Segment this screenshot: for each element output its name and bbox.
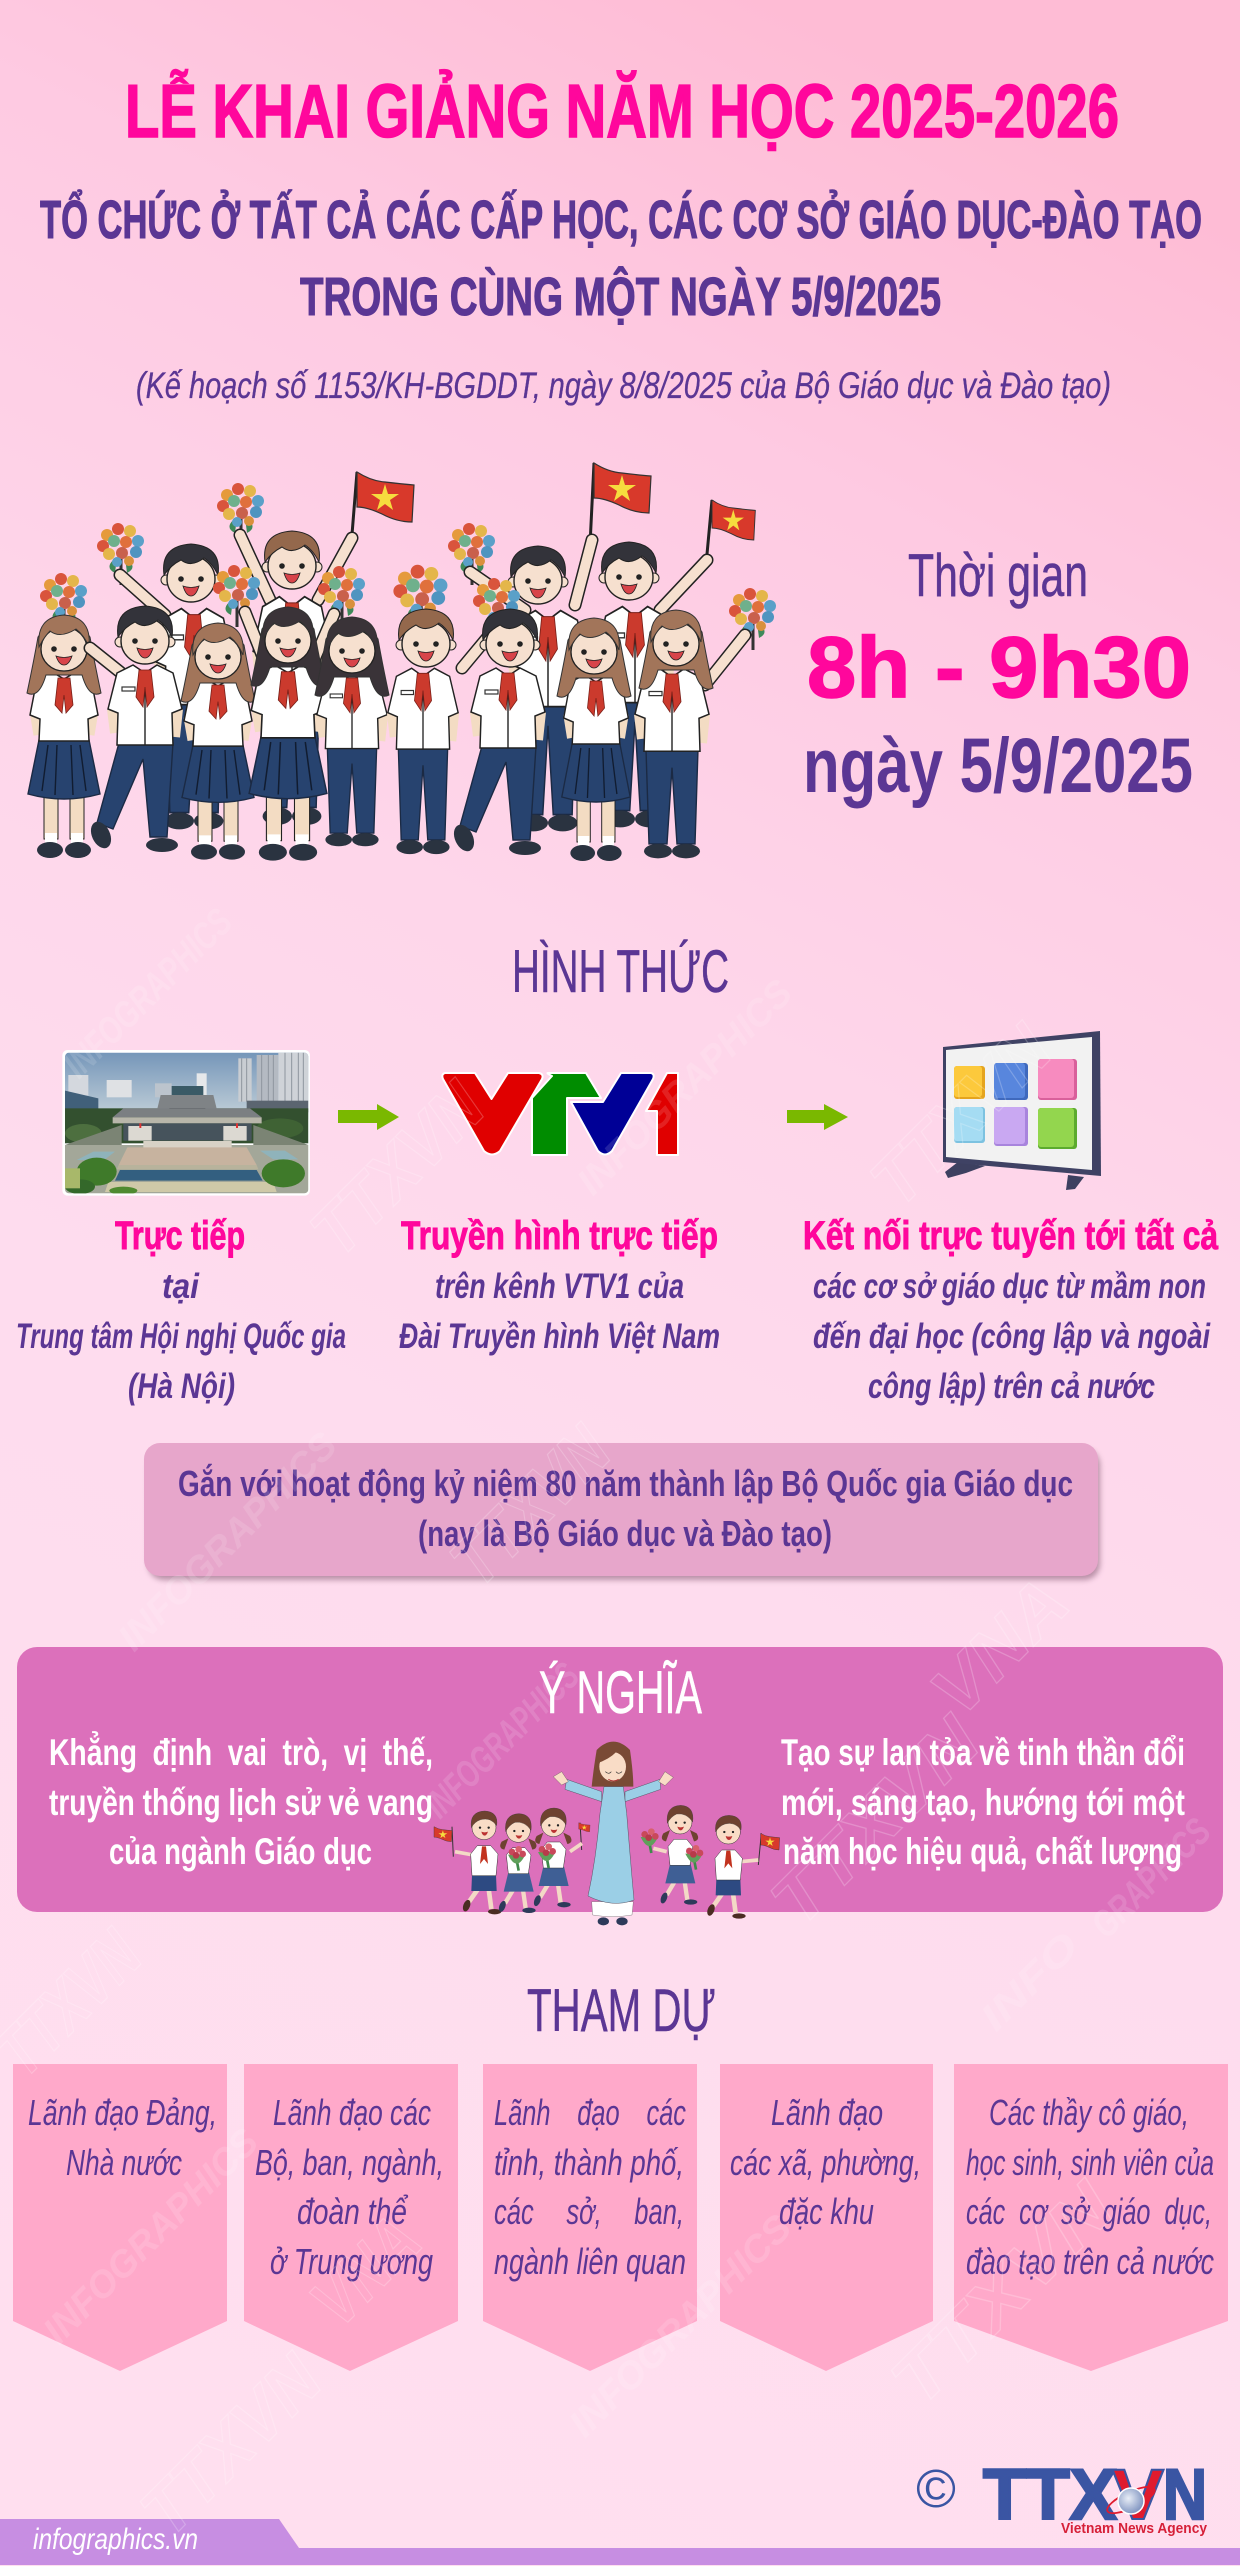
banner 5: [954, 2064, 1228, 2371]
watermarks: TTXVN: [755, 1700, 996, 1941]
logo: TTXVN: V: [1112, 2456, 1164, 2535]
banner 1: Nhà nước: [66, 2142, 182, 2183]
caption: online connection: [803, 1214, 1219, 1406]
watermarks: [0, 901, 1219, 2551]
time block: [803, 542, 1193, 809]
photo: National Convention Center: [62, 1050, 310, 1196]
left text: [49, 1731, 433, 1872]
logo: VTV1: [442, 1073, 678, 1155]
banner 1: [13, 2064, 227, 2371]
watermarks: INFOGRAPHICS: [111, 1425, 345, 1659]
banner 2: [244, 2064, 458, 2371]
front row student 1: [27, 615, 101, 858]
front row student 4: [245, 607, 334, 861]
watermarks: TTXVN: [855, 1009, 1067, 1221]
front row student 5: [315, 617, 389, 846]
banner 2: ở Trung ương: [270, 2241, 433, 2282]
illustration: teacher and pupils: [434, 1742, 780, 1925]
callout: anniversary: [144, 1443, 1100, 1580]
pupils: [434, 1805, 780, 1919]
caption line: Trung tâm Hội nghị Quốc gia: [16, 1317, 346, 1356]
footer site name: infographics.vn: [33, 2523, 198, 2556]
left text: truyền thống lịch sử vẻ vang: [49, 1782, 433, 1823]
teacher: [553, 1742, 673, 1925]
arrow 2: [787, 1104, 848, 1130]
back row student 2: [240, 531, 352, 825]
banner 1: Lãnh đạo Đảng,: [28, 2092, 217, 2133]
watermarks: INFOGRAPHICS: [56, 901, 241, 1086]
time value: 8h - 9h30: [807, 620, 1191, 716]
front row student 7: [450, 609, 545, 855]
watermarks: INFOGRAPHICS: [36, 2121, 267, 2352]
watermarks: TTXVN: [295, 1066, 500, 1271]
illustration: students with flags and flowers: [27, 463, 776, 861]
caption line: Đài Truyền hình Việt Nam: [399, 1317, 720, 1356]
back row student 3: [470, 540, 592, 831]
caption line: công lập) trên cả nước: [868, 1367, 1155, 1406]
watermarks: VNA: [295, 2201, 435, 2341]
front row student 3: [181, 623, 255, 860]
panel: significance: [17, 1647, 1223, 1925]
watermarks: INFOGRAPHICS: [570, 972, 801, 1203]
bouquets and flags of the back row: [97, 463, 755, 585]
banner 2: đoàn thể: [297, 2191, 409, 2232]
watermarks: INFOGRAPHICS: [562, 2207, 800, 2445]
banner 3: ngành liên quan: [494, 2241, 686, 2282]
copyright symbol: ©: [916, 2459, 956, 2519]
banner 2: Lãnh đạo các: [273, 2092, 431, 2133]
banner 4: đặc khu: [779, 2191, 874, 2232]
watermarks: TTXVN: [125, 2339, 337, 2551]
footer band: [0, 2519, 1240, 2565]
front row student 9: [635, 610, 745, 858]
left text: của ngành Giáo dục: [109, 1831, 372, 1872]
logo: TTXVN: Vietnam News Agency: [1061, 2520, 1208, 2537]
watermarks: INFOGRAPHICS: [417, 1655, 588, 1826]
caption line: trên kênh VTV1 của: [435, 1267, 684, 1306]
watermarks: TTXVN: [875, 2166, 1130, 2421]
panel heading: Ý NGHĨA: [539, 1659, 702, 1726]
back row student 4: [596, 542, 707, 827]
icon: television: [943, 1031, 1101, 1190]
left text: Khẳng định vai trò, vị thế,: [49, 1731, 433, 1773]
banner 4: các xã, phường,: [730, 2142, 921, 2183]
watermarks: VNA: [915, 1562, 1084, 1731]
heading: Tham dự: THAM DỰ: [527, 1977, 716, 2044]
banner 3: tỉnh, thành phố,: [494, 2142, 684, 2183]
back row student 1: [120, 544, 233, 829]
front row student 2: [87, 606, 182, 852]
banner 3: Lãnh đạo các: [494, 2092, 686, 2133]
logo: TTXVN: N: [1163, 2456, 1207, 2535]
time label: Thời gian: [908, 542, 1088, 609]
logo: TTXVN: [983, 2456, 1208, 2537]
arrow 1: [338, 1104, 399, 1130]
front row student 6: [388, 609, 458, 854]
banner 3: [483, 2064, 697, 2371]
caption line: (Hà Nội): [128, 1367, 235, 1406]
heading: Hình thức: HÌNH THỨC: [512, 938, 729, 1005]
banner 4: [720, 2064, 933, 2371]
caption: direct: [16, 1214, 346, 1406]
caption line: tại: [162, 1267, 200, 1306]
right text: [781, 1732, 1185, 1872]
bouquets of the front row: [40, 565, 776, 650]
front row student 8: [557, 618, 631, 861]
banner 2: Bộ, ban, ngành,: [255, 2142, 444, 2183]
caption heading: Truyền hình trực tiếp: [401, 1214, 718, 1258]
watermarks: INFO: [973, 1925, 1087, 2039]
callout line 2: (nay là Bộ Giáo dục và Đào tạo): [418, 1513, 832, 1554]
logo: TTXVN: TTX: [983, 2456, 1117, 2535]
banner 3: các sở, ban,: [494, 2191, 684, 2232]
subtitle line 2: TRONG CÙNG MỘT NGÀY 5/9/2025: [300, 266, 941, 327]
banner 4: Lãnh đạo: [771, 2092, 883, 2133]
caption heading: Trực tiếp: [115, 1214, 245, 1258]
watermarks: TTXVN: [435, 1410, 626, 1601]
caption: television broadcast: [399, 1214, 720, 1356]
